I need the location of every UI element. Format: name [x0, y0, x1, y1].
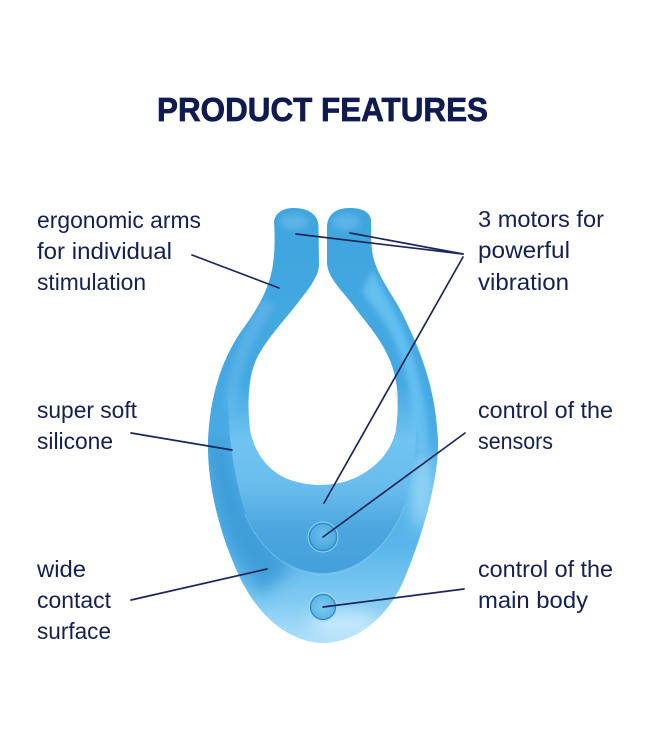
device body	[208, 208, 438, 643]
label: ergonomic arms: stimulation	[37, 269, 146, 295]
band rim	[245, 505, 405, 575]
label: wide contact surface	[36, 556, 112, 644]
label: ergonomic arms	[37, 207, 201, 295]
leader lines: 3 motors	[296, 233, 463, 503]
product illustration	[208, 208, 438, 643]
label: 3 motors: 3 motors for	[478, 206, 604, 232]
label: ergonomic arms: for individual	[37, 238, 172, 264]
label: super soft silicone: super soft	[37, 397, 138, 423]
label: wide contact surface: contact	[37, 587, 112, 613]
label: control of the main body: control of the	[478, 556, 613, 582]
leader line: sensors	[323, 433, 465, 537]
label: 3 motors: powerful	[478, 237, 570, 263]
label: 3 motors: vibration	[478, 269, 569, 295]
label: control of the sensors: control of the	[478, 397, 613, 423]
label: control of the sensors: sensors	[478, 428, 553, 454]
leader line: main body	[323, 589, 464, 607]
button: sensors	[308, 522, 338, 552]
label: 3 motors	[478, 206, 604, 295]
label: ergonomic arms: ergonomic arms	[37, 207, 201, 233]
leader line: silicone	[131, 433, 232, 450]
leader line: contact surface	[131, 569, 267, 600]
label: wide contact surface: surface	[37, 618, 111, 644]
label: control of the main body	[478, 556, 613, 613]
label: super soft silicone: silicone	[37, 428, 113, 454]
inner contact band	[228, 385, 417, 573]
label: control of the main body: main body	[478, 587, 589, 613]
leader line: ergonomic arms	[192, 255, 279, 288]
label: control of the sensors	[478, 397, 613, 454]
shading and highlights	[208, 214, 434, 639]
label: wide contact surface: wide	[36, 556, 86, 582]
button: main body	[309, 593, 337, 621]
label: super soft silicone	[37, 397, 138, 454]
title: PRODUCT FEATURES	[157, 91, 488, 128]
